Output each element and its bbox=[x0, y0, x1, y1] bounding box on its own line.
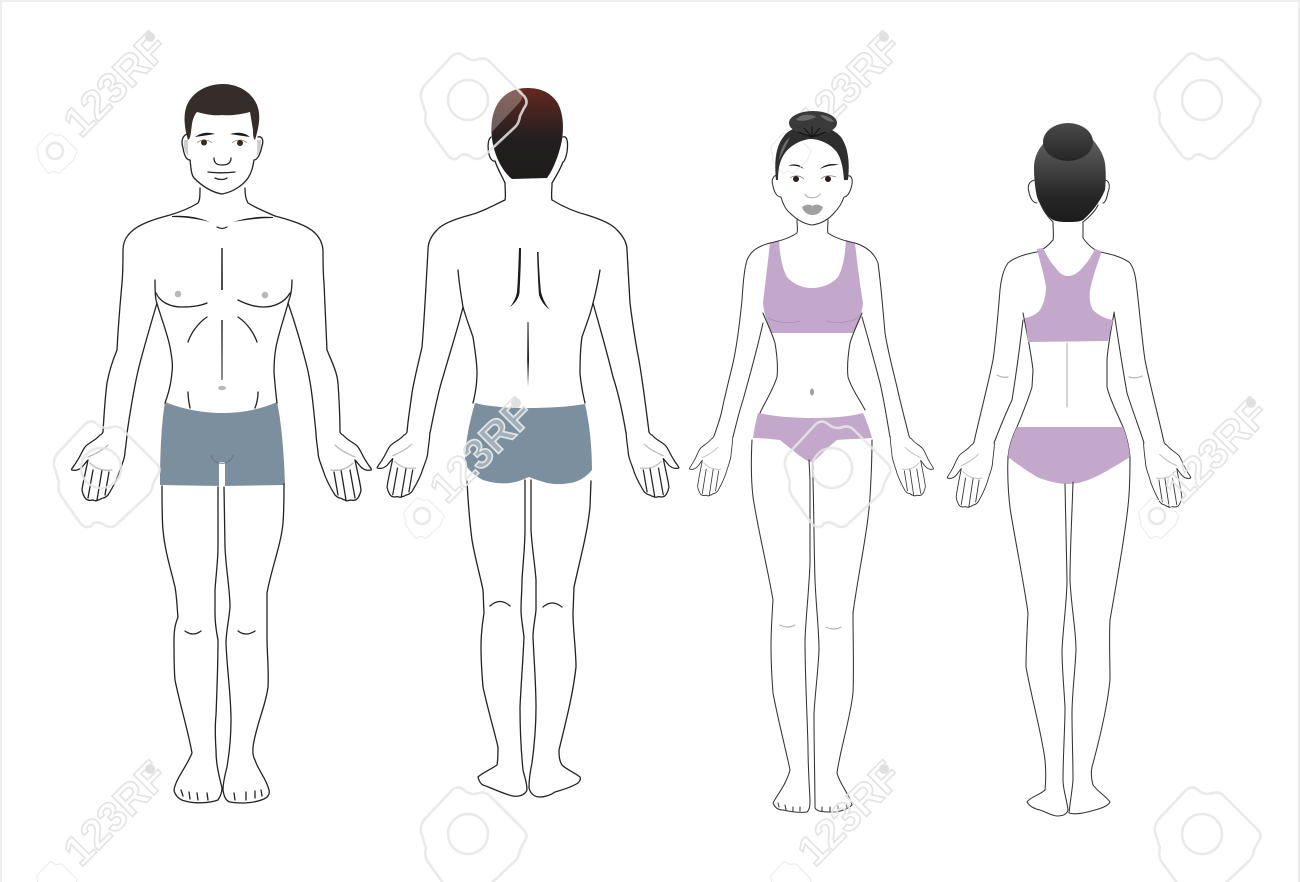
man back right leg bbox=[529, 480, 591, 797]
watermark: middle right icon bbox=[785, 422, 890, 527]
woman front hair highlight bbox=[779, 137, 790, 160]
woman front right torso and arm outline bbox=[828, 220, 909, 437]
woman front bun highlights bbox=[796, 115, 834, 122]
woman back hands bbox=[947, 442, 1191, 507]
woman back underwear top bbox=[1025, 248, 1113, 342]
man front chest and abdomen details bbox=[156, 216, 290, 408]
woman front face features bbox=[788, 164, 839, 215]
woman back right torso and arm outline bbox=[1083, 205, 1164, 457]
man front knees and toes bbox=[181, 631, 262, 800]
man front left torso and arm outline bbox=[103, 188, 200, 433]
woman front bun strands bbox=[798, 126, 826, 137]
watermark: bottom center-right logotype: 123RF bbox=[788, 752, 911, 874]
watermark: bottom left logotype: 123RF bbox=[54, 752, 177, 874]
woman back hair bun bbox=[1043, 123, 1093, 161]
woman front right leg bbox=[813, 440, 872, 812]
man back left leg bbox=[467, 480, 527, 796]
man front underwear bbox=[160, 402, 285, 486]
woman back spine and arm marks bbox=[997, 343, 1142, 407]
man back ears and neck bbox=[488, 137, 568, 200]
woman front toes bbox=[778, 803, 847, 811]
man back hair bbox=[491, 88, 563, 179]
figure: woman back bbox=[947, 123, 1191, 816]
woman front bun bbox=[789, 111, 837, 135]
man back hair watermark overlay bbox=[491, 88, 523, 132]
man back underwear bbox=[465, 403, 592, 484]
woman front underwear top seams bbox=[768, 318, 858, 323]
man front hands bbox=[72, 432, 371, 501]
figure: man back bbox=[377, 88, 679, 797]
woman front left torso and arm outline bbox=[714, 220, 797, 437]
watermark: bottom right icon bbox=[1155, 788, 1260, 882]
man front right torso and arm outline bbox=[245, 188, 340, 433]
man front left leg bbox=[162, 486, 222, 803]
figure: man front bbox=[72, 84, 371, 803]
woman back right leg bbox=[1069, 457, 1130, 814]
watermark: top right icon bbox=[1155, 54, 1260, 159]
man front hair bbox=[185, 84, 259, 140]
woman front underwear top bbox=[763, 240, 863, 333]
man back spine details bbox=[510, 248, 550, 387]
watermark: top center-left icon bbox=[421, 54, 526, 159]
watermark: middle left icon bbox=[54, 422, 159, 527]
woman front left leg bbox=[751, 440, 810, 812]
woman front navel and knees bbox=[780, 388, 841, 629]
watermark: bottom center-left icon bbox=[421, 788, 526, 882]
figure: woman front body bbox=[689, 164, 934, 812]
man front right leg bbox=[223, 484, 284, 803]
watermark: middle far right logotype: 123RF bbox=[1155, 389, 1278, 511]
woman front hair bbox=[775, 126, 849, 180]
woman back underwear bottom bbox=[1008, 427, 1130, 484]
watermark: middle center logotype: 123RF bbox=[420, 389, 543, 511]
woman front underwear bottom bbox=[753, 413, 872, 462]
man front face features bbox=[195, 133, 250, 180]
man front crotch line bbox=[211, 455, 233, 463]
watermark: top left logotype: 123RF bbox=[54, 23, 177, 145]
watermark: top center-right logotype: 123RF bbox=[788, 23, 911, 145]
woman front hair and bun bbox=[775, 111, 849, 180]
woman back ears bbox=[1028, 180, 1109, 203]
man front ear shading bbox=[184, 140, 261, 156]
woman front head outline bbox=[772, 175, 852, 225]
woman back left leg bbox=[1008, 457, 1068, 816]
man back left torso and arm outline bbox=[407, 200, 505, 433]
man back right torso and arm outline bbox=[552, 200, 649, 433]
woman back hair bbox=[1034, 140, 1106, 222]
man back knees bbox=[490, 602, 562, 607]
woman back left torso and arm outline bbox=[974, 205, 1053, 457]
woman front hands bbox=[689, 436, 934, 496]
man front head outline bbox=[182, 134, 263, 194]
man back hands bbox=[377, 432, 679, 497]
